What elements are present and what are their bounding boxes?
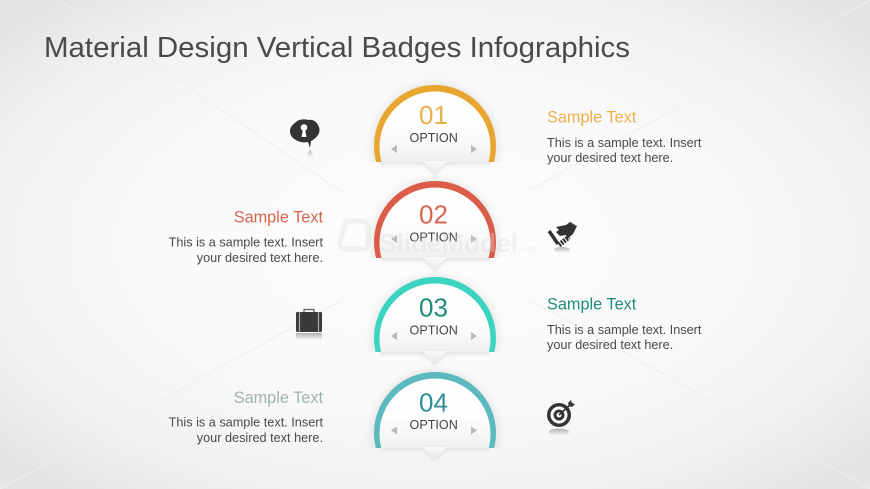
- badge 01: OPTION: [410, 131, 458, 145]
- text block 04: [169, 389, 323, 445]
- badge 04: [370, 370, 500, 460]
- text block 03: [547, 296, 702, 352]
- text block 04: your desired text here.: [197, 431, 323, 445]
- icon: target: [547, 400, 575, 436]
- title: Material Design Vertical Badges Infographics: [44, 32, 630, 64]
- text block 01: [547, 108, 702, 165]
- icon: idea speech bubble: [290, 119, 320, 157]
- badge 01: [370, 82, 500, 175]
- icon: briefcase: [296, 310, 322, 340]
- badge 04: OPTION: [410, 418, 458, 432]
- badge 02: 02: [419, 200, 448, 230]
- text block 01: Sample Text: [547, 108, 637, 126]
- text block 03: This is a sample text. Insert: [547, 323, 702, 337]
- text block 02: [169, 208, 323, 265]
- text block 01: your desired text here.: [547, 151, 673, 165]
- text block 02: This is a sample text. Insert: [169, 236, 323, 250]
- text block 03: Sample Text: [547, 296, 637, 314]
- badge 02: OPTION: [410, 230, 458, 244]
- text block 02: Sample Text: [234, 208, 323, 226]
- badge 03: OPTION: [410, 324, 458, 338]
- watermark: SlideModel: [379, 228, 518, 258]
- text block 01: This is a sample text. Insert: [547, 136, 702, 150]
- watermark: .com: [519, 244, 539, 254]
- watermark: [340, 221, 539, 258]
- text block 04: Sample Text: [234, 389, 323, 407]
- text block 04: This is a sample text. Insert: [169, 416, 323, 430]
- badge 01: 01: [419, 100, 448, 130]
- badge 03: 03: [419, 292, 448, 322]
- badge 02: [370, 178, 500, 271]
- text block 03: your desired text here.: [547, 338, 673, 352]
- badge 03: [370, 274, 500, 365]
- icon: handshake: [549, 222, 577, 253]
- badge 04: 04: [419, 388, 448, 418]
- text block 02: your desired text here.: [197, 251, 323, 265]
